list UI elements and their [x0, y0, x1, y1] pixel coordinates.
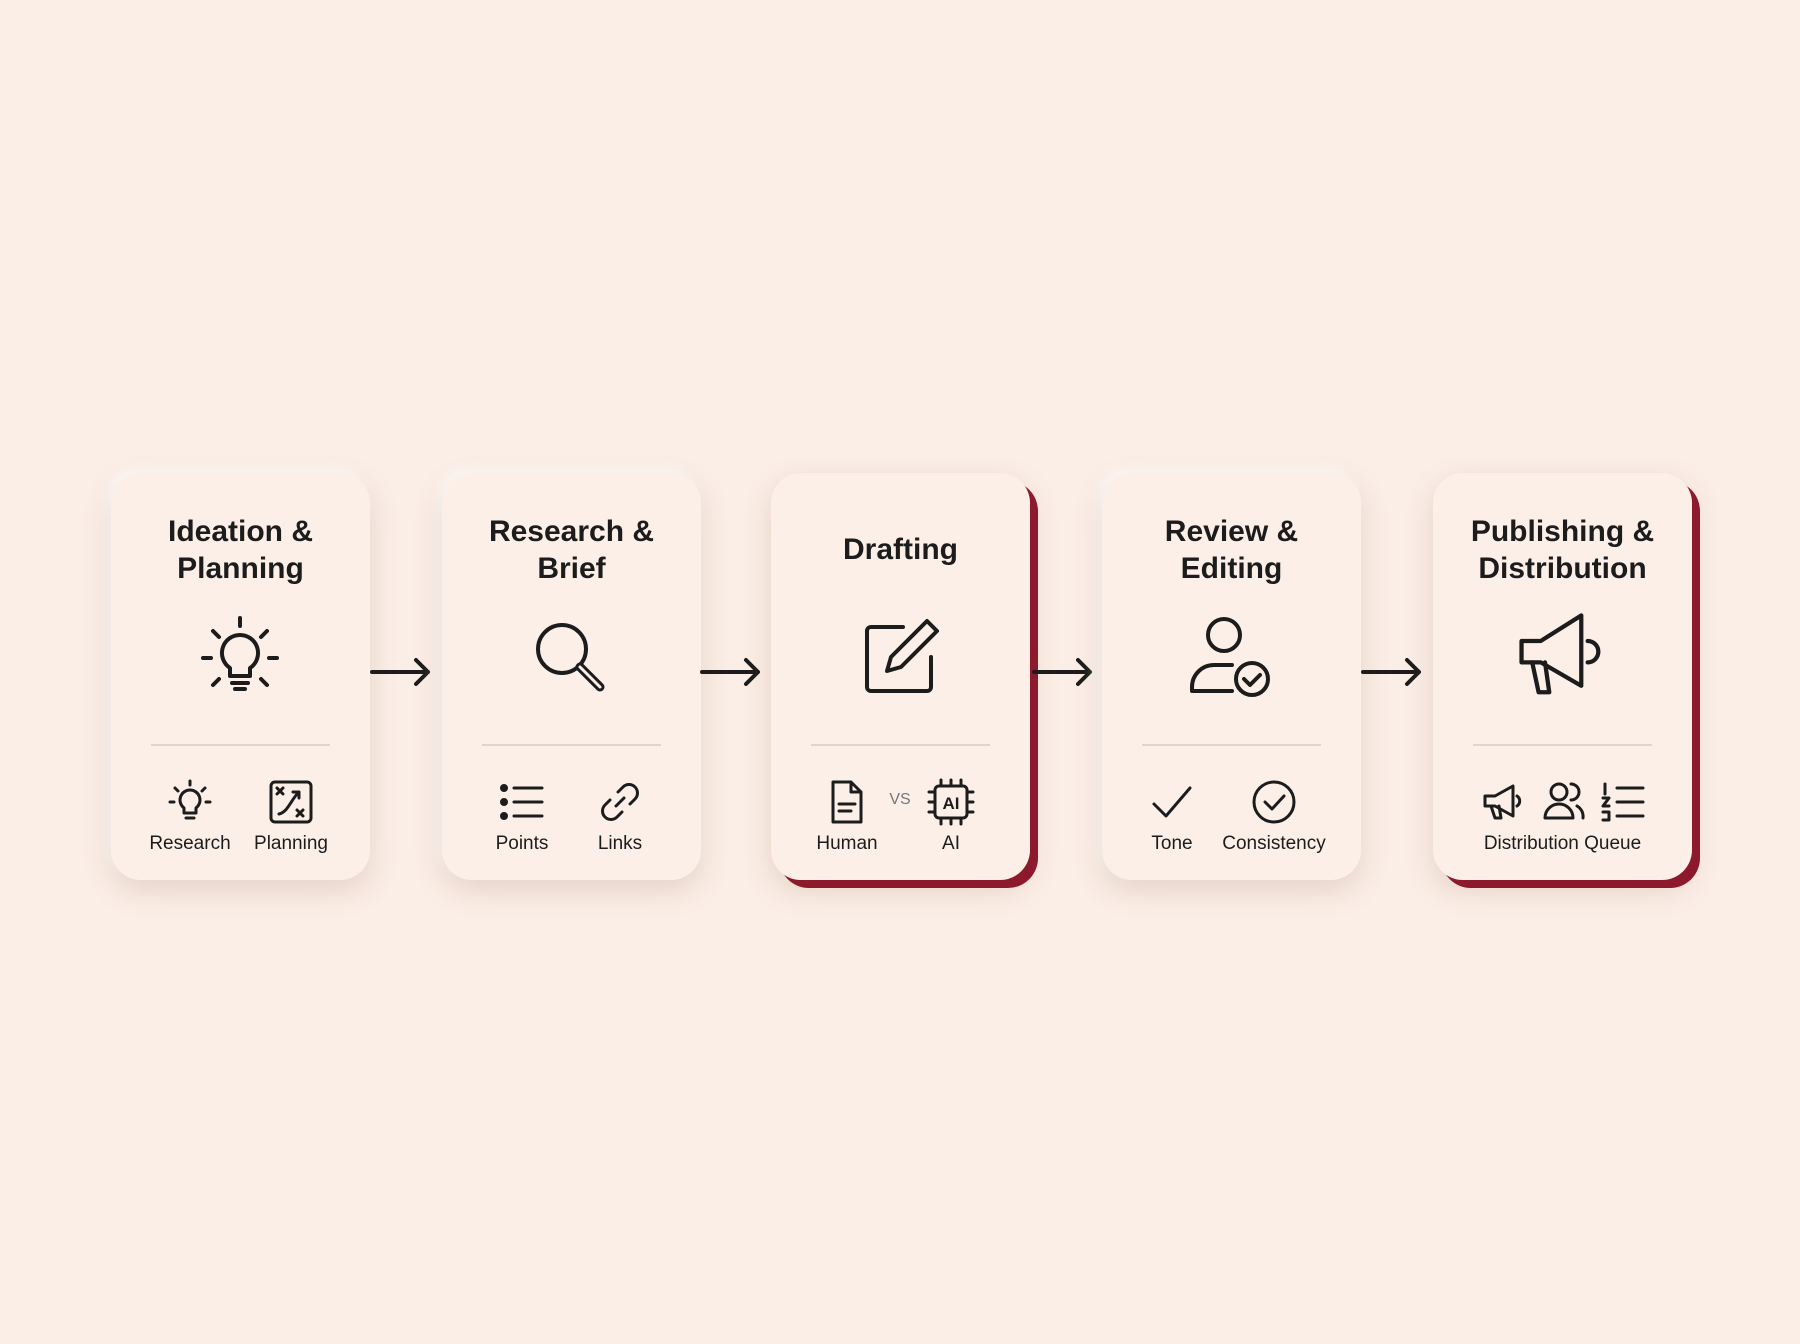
- icon: planning: [270, 780, 312, 824]
- label: Links: [598, 833, 642, 854]
- icon: magnifier: [536, 623, 604, 692]
- card: Drafting: [771, 473, 1030, 880]
- heading: [1471, 515, 1654, 585]
- icons: distribution queue: [1484, 782, 1644, 822]
- card: Research & Brief: [442, 473, 701, 880]
- icon: user check: [1190, 617, 1270, 697]
- icon: document: [832, 780, 862, 824]
- heading: Publishing &: [1471, 515, 1654, 548]
- arrow: [1032, 658, 1092, 686]
- label: Consistency: [1222, 833, 1326, 854]
- icon: research: [168, 780, 212, 820]
- arrow: [700, 658, 760, 686]
- label: Planning: [254, 833, 328, 854]
- icon: circle check: [1252, 780, 1296, 824]
- heading: Brief: [537, 552, 606, 585]
- card: Review & Editing: [1102, 473, 1361, 880]
- label: Tone: [1151, 833, 1193, 854]
- label: AI: [942, 833, 960, 854]
- card: Publishing & Distribution: [1433, 473, 1692, 880]
- label: Human: [816, 833, 878, 854]
- heading: [168, 515, 313, 585]
- icon: AI chip: [928, 778, 974, 826]
- icon: edit: [865, 618, 940, 693]
- arrow: [370, 658, 430, 686]
- vs: VS: [889, 791, 911, 808]
- heading: [489, 515, 654, 585]
- card: Ideation & Planning: [111, 473, 370, 880]
- heading: Planning: [177, 552, 304, 585]
- label: Distribution Queue: [1484, 833, 1641, 854]
- icon: link: [601, 783, 639, 821]
- arrow: [1361, 658, 1422, 686]
- label: Points: [496, 833, 548, 854]
- icon: check: [1152, 786, 1192, 818]
- heading: Review &: [1165, 515, 1298, 548]
- heading: Ideation &: [168, 515, 313, 548]
- icon: megaphone: [1519, 613, 1600, 694]
- heading: [1165, 515, 1298, 585]
- heading: Research &: [489, 515, 654, 548]
- heading: Distribution: [1478, 552, 1647, 585]
- icon: lightbulb: [201, 616, 279, 691]
- heading: Editing: [1181, 552, 1282, 585]
- icon: AI chip: AI: [942, 794, 960, 813]
- label: Research: [149, 833, 231, 854]
- heading: Drafting: [843, 533, 958, 566]
- icon: list: [500, 784, 544, 820]
